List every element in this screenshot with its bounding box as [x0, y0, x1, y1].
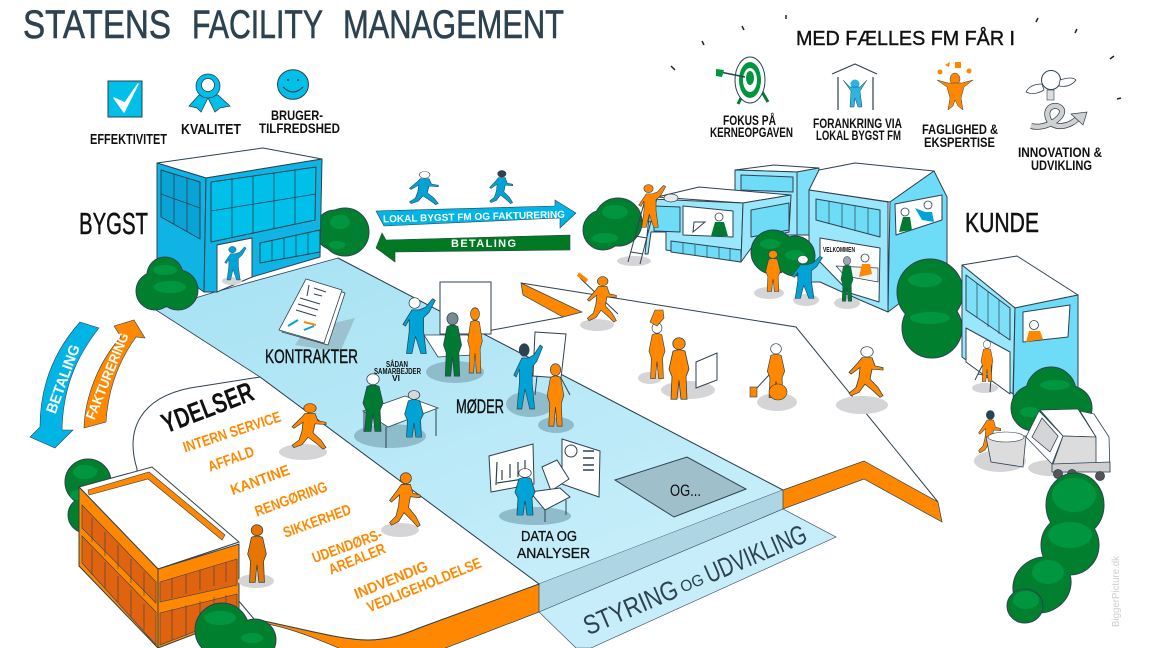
group: desk conversation: [354, 360, 438, 448]
icon: house with person: [832, 64, 877, 110]
arrow: betaling (green): BETALING: [451, 238, 516, 250]
panel: ydelser slab side: [254, 584, 539, 648]
label: faglighed og ekspertise: FAGLIGHED &: [922, 122, 998, 137]
person: ladder electrician: [972, 341, 998, 393]
label: brugertilfredshed: TILFREDSHED: [259, 120, 340, 136]
label: data og analyser: [517, 529, 590, 562]
plaza: blue ground: [156, 258, 783, 584]
label: fokus på kerneopgaven: FOKUS PÅ: [723, 113, 776, 128]
og panel: OG...: [670, 481, 701, 500]
speech: sådan samarbejder vi: SÅDAN: [386, 360, 408, 369]
list: ydelser services: INTERN SERVICE: [181, 409, 283, 456]
strip label: STYRING: [579, 574, 683, 641]
strip label: [579, 519, 811, 641]
people in upper window: [899, 201, 934, 232]
trees: right cluster: [1011, 367, 1092, 431]
decorative rays: [671, 15, 1121, 99]
person: roller painter: [578, 274, 618, 331]
group: data analyst: [489, 439, 600, 525]
list: ydelser services: SIKKERHED: [281, 501, 354, 542]
label: faglighed og ekspertise: [922, 122, 998, 150]
heading: ydelser: YDELSER: [157, 376, 258, 439]
label: innovation og udvikling: INNOVATION &: [1018, 145, 1102, 160]
person: runner woman: [490, 170, 513, 204]
person: window worker: [1026, 320, 1043, 342]
tree: right of customer: [897, 259, 963, 358]
tree behind orange building: [65, 459, 111, 533]
icon: kvalitet ribbon: [189, 74, 230, 112]
person: runner on plane: [836, 347, 888, 414]
panel: ydelser slab: [133, 377, 539, 640]
icon: juggler: [937, 62, 973, 110]
title: MANAGEMENT: [343, 3, 564, 47]
og panel: [615, 457, 746, 517]
title: [23, 3, 564, 47]
speech: sådan samarbejder vi: [374, 360, 421, 383]
strip label: OG: [678, 571, 707, 596]
list: ydelser services: [181, 409, 484, 616]
arrow: fakturering (orange curved): FAKTURERING: [82, 330, 132, 422]
list: ydelser services: AFFALD: [206, 443, 257, 476]
workers on ydelser slab: [238, 404, 420, 588]
panel: customer plane: [338, 258, 942, 522]
person: janitor with vacuum: [750, 344, 797, 411]
group: kitchen staff: [638, 310, 717, 399]
arrow: betaling (blue curved): BETALING: [43, 342, 84, 416]
customer buildings: [645, 163, 947, 312]
orange triangle edge: [521, 283, 582, 317]
label: bygst: BYGST: [79, 206, 148, 241]
trees: bottom: [195, 603, 276, 648]
title: STATENS: [23, 3, 171, 47]
person: bygst door host: [222, 246, 246, 285]
label: effektivitet: EFFEKTIVITET: [90, 132, 167, 148]
tree: bygst right: [315, 208, 369, 256]
icon: winged light bulb and loop arrow: [1026, 70, 1087, 127]
label: møder: MØDER: [456, 397, 504, 418]
label: fokus på kerneopgaven: [710, 113, 793, 140]
speech: sådan samarbejder vi: SAMARBEJDER: [374, 367, 421, 376]
label: kontrakter: KONTRAKTER: [265, 347, 358, 368]
icon: effektivitet checkbox: [108, 81, 142, 117]
trees: hedge column: [1002, 473, 1104, 624]
people at reception: [754, 251, 872, 309]
list: ydelser services: RENGØRING: [253, 478, 330, 520]
arrow: lokal bygst fm og fakturering: LOKAL BYGST FM OG FAKTURERING: [383, 210, 565, 225]
label: fokus på kerneopgaven: KERNEOPGAVEN: [710, 125, 793, 140]
person: runner with folder: [409, 171, 438, 205]
title: FACILITY: [192, 3, 323, 47]
icon: target with arrow: [716, 57, 768, 104]
label: forankring via lokal bygst fm: [813, 116, 902, 143]
list: ydelser services: UDENDØRS-: [310, 526, 384, 567]
list: ydelser services: INDVENDIG: [352, 558, 431, 603]
list: ydelser services: AREALER: [326, 540, 388, 579]
garbage truck: [1026, 409, 1110, 480]
label: brugertilfredshed: [259, 107, 340, 136]
label: kvalitet: KVALITET: [181, 121, 241, 138]
label: kunde: KUNDE: [965, 207, 1039, 238]
arrow: betaling (blue curved): [30, 322, 99, 448]
bygst building: [157, 148, 322, 292]
label: forankring via lokal bygst fm: LOKAL BYGST FM: [816, 128, 901, 143]
strip: styring og udvikling: [539, 509, 836, 648]
heading: med fælles fm får i: MED FÆLLES FM FÅR I: [796, 27, 1015, 50]
icon: smiley: [278, 70, 308, 99]
label: data og analyser: DATA OG: [521, 529, 577, 545]
arrow: betaling (green): [376, 233, 570, 262]
tree: bygst left: [136, 257, 198, 310]
arrow: lokal bygst fm og fakturering: [376, 200, 576, 228]
strip label: UDVIKLING: [700, 519, 811, 589]
label: data og analyser: ANALYSER: [517, 546, 590, 562]
speech: velkommen: VELKOMMEN: [823, 247, 855, 254]
list: ydelser services: KANTINE: [228, 462, 292, 499]
label: innovation og udvikling: [1018, 145, 1102, 173]
contracts documents: [279, 279, 355, 352]
plaza front step: [539, 490, 783, 612]
group: flipchart meeting: [506, 332, 574, 433]
label: brugertilfredshed: BRUGER-: [271, 107, 323, 123]
small customer building: [962, 256, 1078, 410]
label: faglighed og ekspertise: EKSPERTISE: [924, 135, 995, 150]
group: meeting at whiteboard: [403, 282, 491, 383]
credit: BiggerPicture.dk: [1111, 555, 1122, 627]
label: innovation og udvikling: UDVIKLING: [1031, 158, 1092, 173]
speech: sådan samarbejder vi: VI: [392, 374, 400, 383]
trees: customer: [583, 198, 815, 276]
label: forankring via lokal bygst fm: FORANKRING VIA: [813, 116, 902, 131]
orange building: [79, 467, 239, 648]
garbage bin and worker: [974, 411, 1026, 472]
list: ydelser services: VEDLIGEHOLDELSE: [364, 555, 484, 616]
orange plane edge: [783, 461, 942, 522]
office worker in window: [693, 213, 728, 236]
person: painter on ladder: [617, 185, 678, 266]
